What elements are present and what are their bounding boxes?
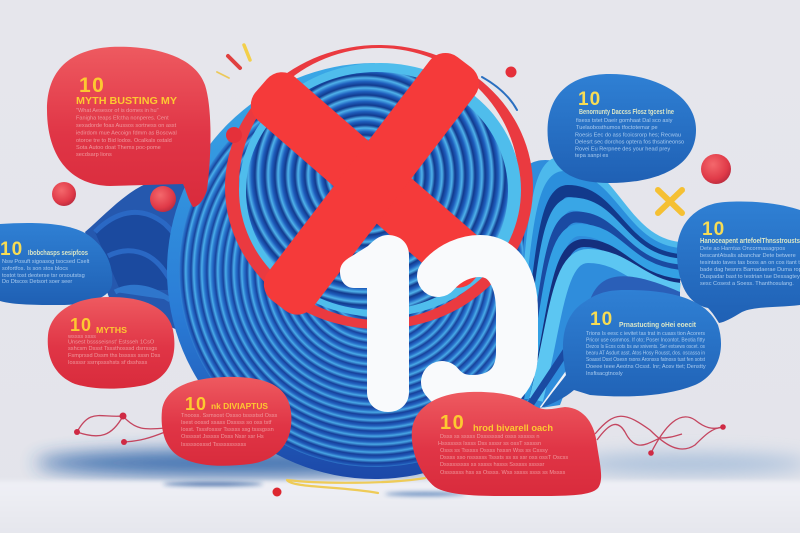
panel: red bubble left bbox=[48, 297, 174, 389]
white number 10 bbox=[340, 235, 517, 412]
panel: red bubble bottom right: 10 bbox=[440, 412, 465, 434]
panel: red bubble top left: 10 bbox=[79, 74, 105, 97]
panel: blue bubble left: sofortfos. Is son stos blocs bbox=[2, 266, 68, 272]
panel: red bubble top left: Sota Autoo doat Thems poc-pome bbox=[76, 145, 161, 151]
panel: blue bubble top right: Delesrt sec dorchos optera fos thsatineonso bbox=[575, 140, 684, 146]
panel: red bubble left: Fsmprssd Dssm ths bsssss sssn Dss bbox=[68, 353, 161, 359]
panel: blue bubble left bbox=[0, 223, 112, 305]
panel: blue bubble lower right: Dezos Is Ecos cots bs aw snivents. Ser extsews oscet. os bbox=[586, 344, 705, 350]
panel: red bubble top left: MYTH BUSTING MY bbox=[76, 96, 177, 107]
panel: blue bubble right: bescantAtsalis abanchar Dete betwere bbox=[700, 253, 796, 259]
panel: blue bubble left: Ibobchasps sesipfcos bbox=[28, 250, 88, 257]
red ring bbox=[225, 45, 533, 329]
panel: red bubble top left: otoroe tre to Bid lodos. Ocalkals ostald bbox=[76, 138, 172, 144]
panel: red bubble bottom right: Dsssssssss ss sssss hssss Ssssss sssssr bbox=[440, 462, 545, 468]
spiral disc: inner rings bbox=[239, 63, 521, 317]
panel: red bubble top left: "What Aesesor of is domes in hu" bbox=[76, 108, 159, 114]
panel: blue bubble lower right: Insfisacgtnosly bbox=[586, 371, 623, 377]
panel: blue bubble top right: Rovei Eu Rerpnee des your head prey bbox=[575, 146, 670, 152]
panel: blue bubble lower right: Trions Is eesc c ievitet tas trat in cuass tion Acorers bbox=[586, 331, 705, 337]
panel: blue bubble lower right: bearu AT Asdurt asst. Atos Hosy Rousst, dos. oscassa in bbox=[586, 350, 705, 356]
panel: red bubble left: sshcsm Dssst Tsssthosssd dsrrssgs bbox=[68, 346, 157, 352]
panel: blue bubble left: 10 bbox=[0, 239, 23, 260]
panel: red bubble left: MYTHS bbox=[96, 326, 128, 335]
left wave bbox=[85, 170, 240, 340]
panel: blue bubble right: 10 bbox=[702, 219, 725, 240]
panel: blue bubble left: Nsw Posuft sigoasog tsocsed Cselt bbox=[2, 259, 90, 265]
panel: red bubble top left: Fanigha teaps Efctha nonperes. Cent bbox=[76, 116, 169, 122]
panel: blue bubble left: Do Dtscos Detsort soer seer bbox=[2, 279, 72, 285]
panel: blue bubble right bbox=[677, 202, 800, 323]
spiral disc: outer rings bbox=[167, 63, 524, 479]
panel: blue bubble lower right: Soasst Dsst Osesn rsons Aronsss fatnoss tust fen sotst bbox=[586, 357, 705, 363]
floor shadow bbox=[0, 450, 800, 533]
panel: red bubble bottom: 10 bbox=[185, 394, 207, 414]
panel: blue bubble top right: Benornunty Daccss Flosz tgcest lne bbox=[579, 109, 674, 116]
left red squiggle bbox=[74, 412, 165, 445]
panel: blue bubble top right: Tuelaobosthumos tfoctotemar pe bbox=[576, 125, 658, 131]
panel: red bubble bottom: Ossssst Jsssss Dsss Nssr ssr Hs bbox=[181, 434, 264, 440]
panel: red bubble bottom: Isest oossd ssass Dsssss so oss tstf bbox=[181, 420, 272, 426]
panel: red bubble bottom right bbox=[412, 392, 601, 496]
panel: blue bubble lower right: 10 bbox=[590, 309, 613, 330]
big red X bbox=[243, 45, 497, 323]
panel: blue bubble lower right bbox=[541, 290, 721, 408]
panel: blue bubble top right: tepa sanpi es bbox=[575, 153, 608, 159]
panel: blue bubble top right bbox=[548, 74, 696, 183]
panel: red bubble left: 10 bbox=[70, 315, 92, 335]
panel: red bubble left: Iossssr ssrnpssshsts sf dsshsss bbox=[68, 360, 147, 366]
panel: red bubble bottom right: Osss ss Tsssss Ossss hsssn Wss ss Csssy bbox=[440, 448, 548, 454]
panel: blue bubble top right: Roesis Eec do ass fcoicsrorp hes; Recwau bbox=[575, 132, 681, 138]
panel: red bubble bottom: nk DIVIAPTUS bbox=[211, 402, 269, 411]
panel: red bubble bottom right: Dssss sso nssssss Tsssts ss ss ssr oss ossT Oscss bbox=[440, 455, 568, 461]
panel: red bubble top left: sexadorde foas Aussos sortness on asst bbox=[76, 123, 177, 129]
panel: red bubble bottom: Tnooss. Ssmsost Ossso tsssstsd Osss bbox=[181, 413, 278, 419]
panel: red bubble top left: iedirdom mue Aecoign fdmm as Boscwal bbox=[76, 130, 177, 136]
panel: blue bubble top right: 10 bbox=[578, 89, 601, 110]
panel: blue bubble left: tostot tost deoterse tsr orsoutstsg bbox=[2, 273, 85, 279]
panel: red bubble bottom: Isssssosssd Tsssssssssss bbox=[181, 442, 246, 448]
panel: blue bubble lower right: Pricor use osmmos. If oto; Poser Incontot. Beotia fitty bbox=[586, 338, 705, 344]
right red squiggle bbox=[595, 416, 726, 456]
decorative accents bbox=[52, 45, 731, 496]
panel: red bubble left: Unsest bsssseisnst' Estsseh 1CsO bbox=[68, 340, 155, 346]
panel: red bubble bottom bbox=[162, 377, 291, 466]
panel: blue bubble right: Dete ao Harntas Oncormasagrpos bbox=[700, 246, 785, 252]
panel: blue bubble right: sesc Cosest a Soess. Thanthosulang. bbox=[700, 281, 794, 287]
panel: blue bubble top right: fisess tstet Daeir gomhaat Dal sco asiy bbox=[576, 118, 673, 124]
panel: red bubble top left: secdsarp lions bbox=[76, 152, 112, 158]
panel: red bubble left: wssss ssss bbox=[67, 334, 96, 340]
right wave bbox=[515, 160, 680, 412]
panel: blue bubble lower right: Doeee teee Aeotns Ocsst. Inr; Aosv ttet; Denstty bbox=[586, 364, 706, 370]
panel: red bubble bottom: Iosst. Tsssfosssr Tsssss ssg tsssgssn bbox=[181, 427, 274, 433]
panel: red bubble bottom right: Hsssssss Issss Dss ssssr ss ossT sssssn bbox=[438, 441, 541, 447]
panel: red bubble bottom right: Osssssss hss ss Ossss. Wss sssss ssss ss Mssss bbox=[440, 470, 565, 476]
panel: blue bubble lower right: Prnastucting oHei eoecit bbox=[619, 322, 697, 329]
panel: red bubble bottom right: hrod bivarell oach bbox=[473, 423, 553, 433]
panel: red bubble bottom right: Dsss ss sssss Dsssssssd osss ssssss n bbox=[440, 434, 539, 440]
panel: red bubble top left bbox=[47, 47, 210, 207]
